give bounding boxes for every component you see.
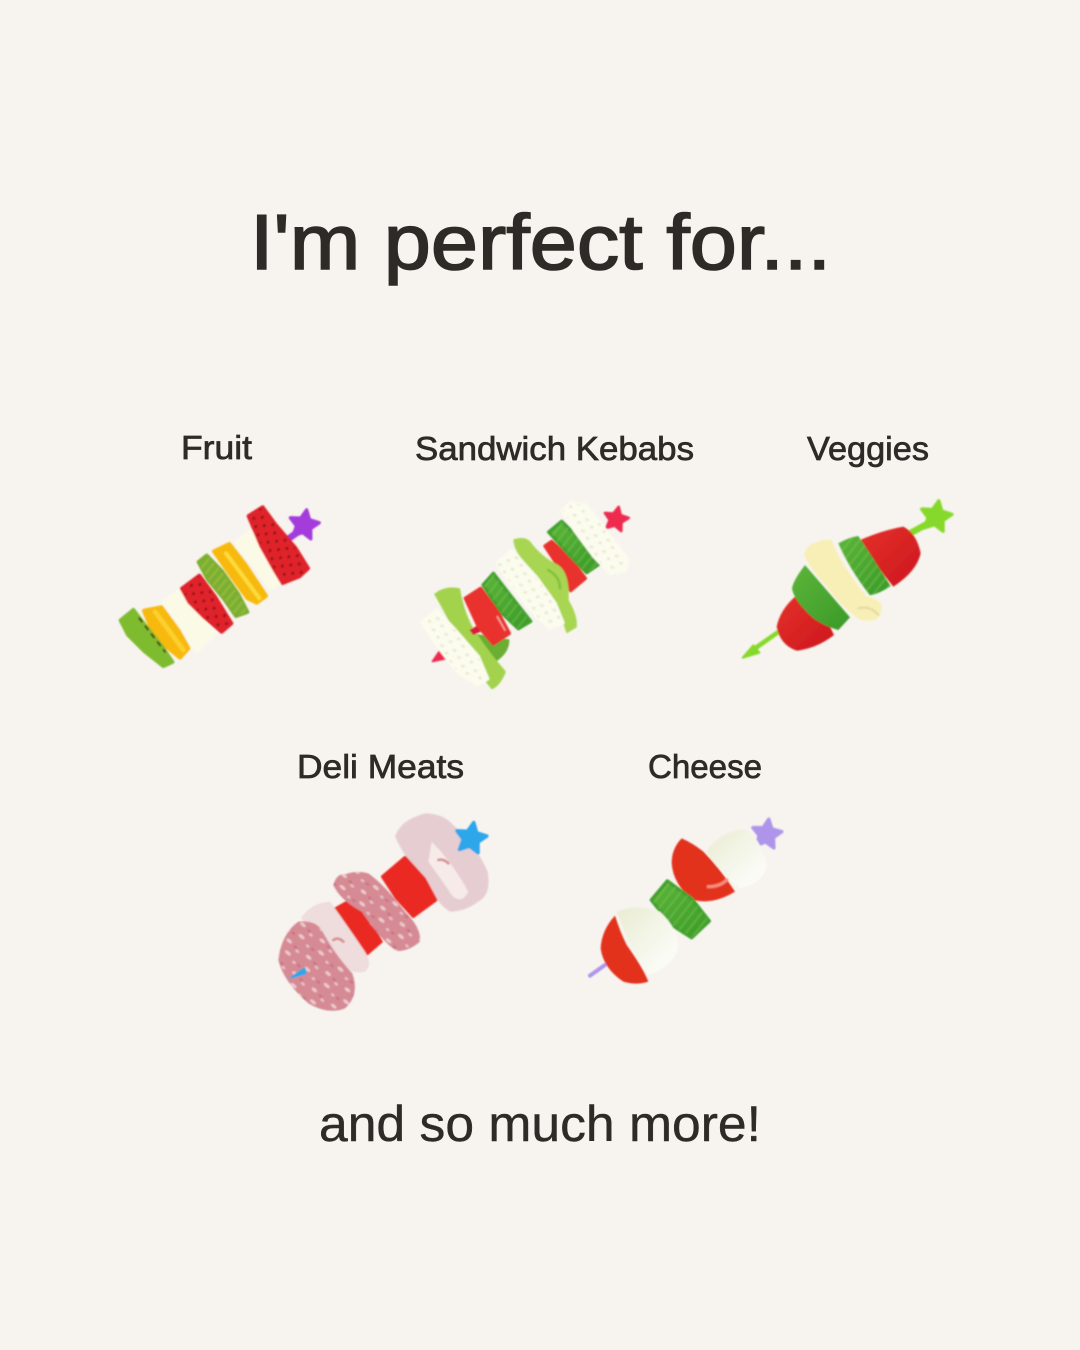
label: Veggies: Veggies — [807, 430, 929, 467]
closing line: and so much more! — [319, 1096, 761, 1152]
deli meat skewer illustration — [278, 813, 489, 1011]
fruit skewer illustration — [121, 507, 321, 666]
title: I'm perfect for... — [250, 198, 831, 286]
veggie skewer illustration — [743, 498, 954, 658]
label: Cheese: Cheese — [648, 748, 762, 785]
label: Deli Meats: Deli Meats — [297, 748, 464, 785]
label: Sandwich Kebabs: Sandwich Kebabs — [415, 430, 694, 467]
label: Fruit: Fruit — [181, 429, 252, 466]
sandwich kebab skewer illustration — [422, 503, 630, 689]
cheese skewer illustration — [590, 817, 783, 984]
